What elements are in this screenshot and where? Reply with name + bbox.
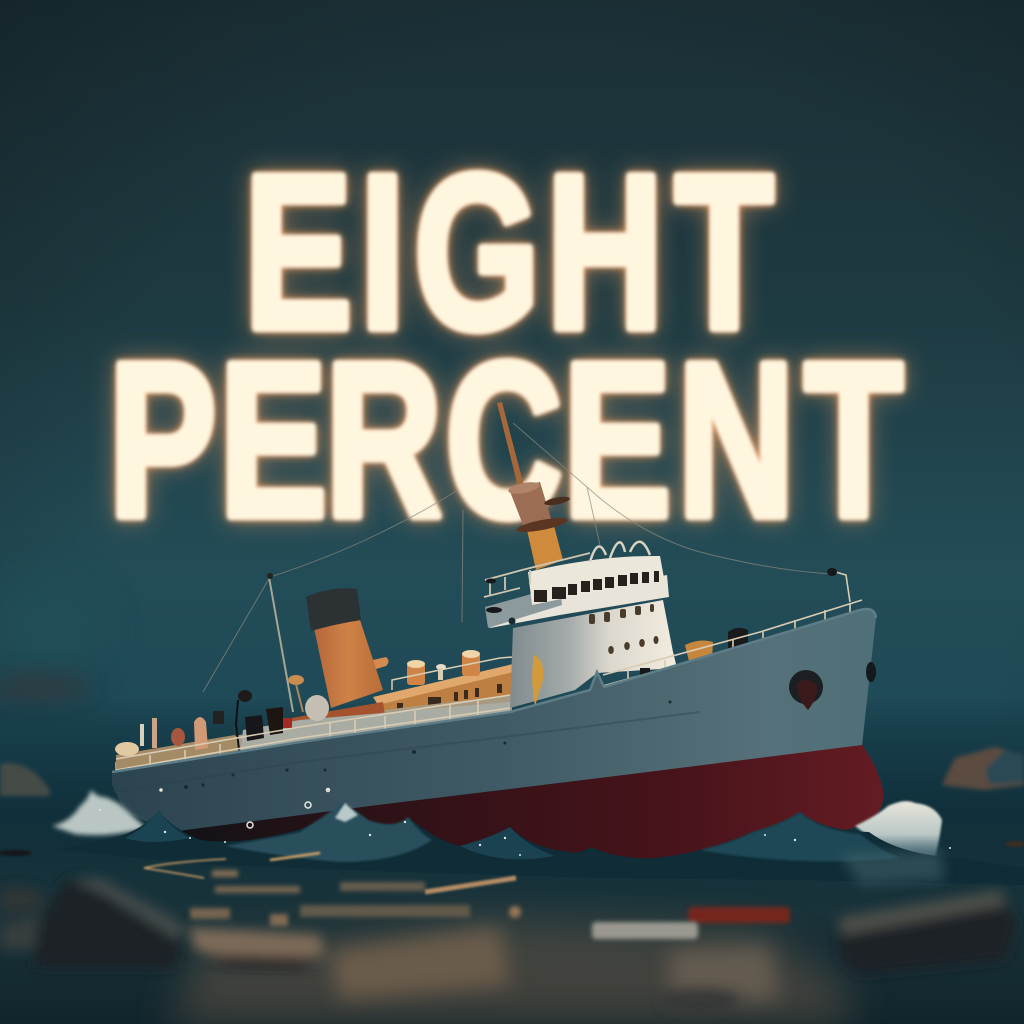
foreground centre slab [188,927,325,968]
side knob on bow [866,662,876,682]
bridge tower [484,542,677,708]
waves around the hull [60,803,1024,885]
title: EIGHT PERCENT glowing text: PERCENT [109,317,903,563]
warm light reflections on water [144,850,945,1024]
main funnel [306,588,388,708]
aft railing [116,695,510,770]
hawse hole [789,670,823,710]
left foam splash [52,790,146,835]
white cylinder [592,922,698,939]
water droplets [160,788,330,828]
foreground left rock [0,878,185,968]
red cylinder [688,907,790,923]
rigging wires [203,423,830,692]
forward mast and discs [497,402,570,570]
aft mast [267,573,293,712]
hull upper grey section [112,609,876,836]
bow deck and railing [603,568,862,695]
background rocks [0,747,1024,796]
deck house [373,650,513,736]
water surface [0,700,1024,1024]
ship [112,402,884,862]
aft deck structure and equipment [115,675,512,772]
hull red lower section [170,745,884,862]
right foam splash [855,801,942,862]
small dark debris left [0,850,32,856]
foreground right rock [838,890,1018,975]
title: EIGHT PERCENT glowing text: EIGHT [244,129,774,375]
title: EIGHT PERCENT glowing text [109,129,903,563]
debris far right [1005,841,1024,847]
